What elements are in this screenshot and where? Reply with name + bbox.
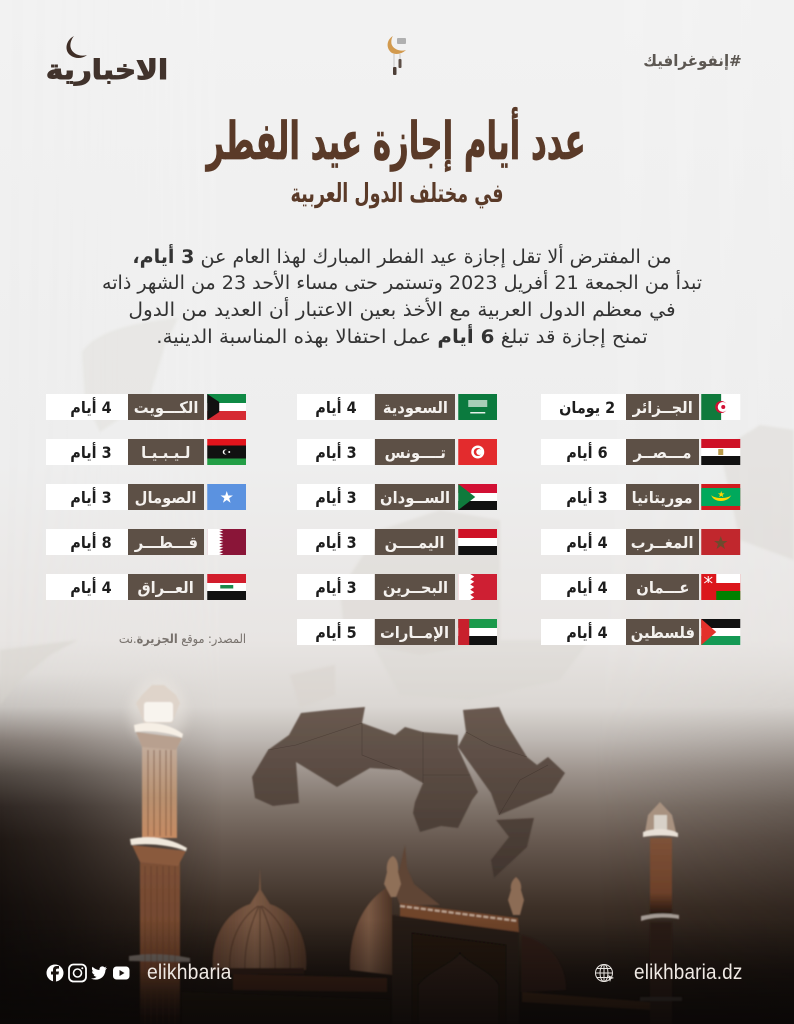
row: Somalia — [46, 484, 246, 510]
row: UAE — [297, 619, 497, 645]
row: Egypt — [541, 439, 740, 465]
mosque illustration — [129, 685, 682, 1024]
row: Yemen: اليمــــن — [385, 532, 445, 552]
social handle: elikhbaria — [147, 961, 232, 984]
logo: Alikhbaria — [46, 36, 168, 86]
row: Egypt: 6 أيام — [566, 442, 608, 462]
row: Kuwait: 4 أيام — [70, 398, 111, 416]
row: Bahrain: 3 أيام — [315, 578, 356, 596]
row: Algeria: الجــزائر — [632, 398, 693, 416]
minaret glow — [130, 678, 186, 746]
right minaret — [640, 802, 682, 1024]
background: gradient, faint world map and mosque — [0, 318, 794, 1024]
source note: المصدر: موقع الجزيرة.نت — [119, 631, 246, 646]
lower walls — [182, 974, 650, 1024]
row: Palestine — [541, 619, 740, 645]
row: Somalia: 3 أيام — [70, 488, 111, 506]
row: Morocco: 4 أيام — [566, 532, 608, 552]
row: Kuwait — [46, 394, 246, 420]
row: Sudan: 3 أيام — [315, 488, 356, 506]
row: Mauritania: موريتانيا — [632, 488, 693, 506]
row: Somalia: الصومال — [135, 488, 197, 506]
row: Libya: لـيـبـيـا — [141, 442, 191, 462]
intro paragraph: تمنح إجازة قد تبلغ 6 أيام عمل احتفالا بهذه المناسبة الدينية. — [156, 326, 648, 348]
icon: youtube — [113, 966, 130, 980]
icon: instagram — [69, 964, 86, 982]
icon: facebook — [46, 964, 64, 982]
row: UAE: 5 أيام — [315, 622, 356, 642]
intro paragraph: من المفترض ألا تقل إجازة عيد الفطر المبارك لهذا العام عن 3 أيام، — [132, 246, 672, 268]
row: Sudan — [297, 484, 497, 510]
row: Oman: 4 أيام — [566, 578, 608, 596]
row: Algeria — [541, 394, 740, 420]
row: UAE: الإمــارات — [380, 622, 450, 642]
row: Algeria: 2 يومان — [559, 398, 615, 416]
emblem: crescent and lanterns — [388, 36, 406, 75]
intro paragraph: في معظم الدول العربية مع الأخذ بعين الاعتبار أن العديد من الدول — [128, 299, 676, 321]
row: Saudi Arabia: السعودية — [382, 398, 448, 416]
row: Qatar: قـــطـــر — [134, 532, 198, 552]
faint world map — [0, 318, 794, 708]
title: عدد أيام إجازة عيد الفطر — [206, 112, 586, 172]
website: elikhbaria.dz — [634, 961, 742, 984]
subtitle: في مختلف الدول العربية — [290, 179, 504, 209]
row: Mauritania — [541, 484, 740, 510]
row: Iraq — [46, 574, 246, 600]
row: Libya: 3 أيام — [70, 442, 111, 462]
row: Kuwait: الكـــويت — [134, 398, 198, 416]
icon: globe — [595, 964, 614, 982]
row: Sudan: الســودان — [380, 488, 450, 506]
row: Iraq: العــراق — [138, 578, 194, 596]
row: Bahrain — [297, 574, 497, 600]
row: Bahrain: البحــرين — [382, 578, 448, 596]
logo wordmark: الاخبارية — [46, 55, 168, 86]
row: Iraq: 4 أيام — [70, 578, 111, 596]
logo crescent — [66, 36, 87, 58]
row: Palestine: 4 أيام — [566, 622, 608, 642]
row: Tunisia: تــــونس — [384, 442, 446, 462]
row: Saudi Arabia — [297, 394, 497, 420]
row: Oman — [541, 574, 740, 600]
left dome — [213, 868, 306, 974]
row: Morocco — [541, 529, 740, 555]
gateway — [392, 903, 519, 1024]
row: Qatar — [46, 529, 246, 555]
row: Qatar: 8 أيام — [70, 532, 111, 552]
row: Yemen — [297, 529, 497, 555]
intro paragraph — [102, 244, 702, 348]
left minaret — [129, 685, 190, 1024]
row: Oman: عـــمان — [636, 578, 689, 596]
social icons — [46, 964, 130, 982]
row: Mauritania: 3 أيام — [566, 488, 608, 506]
row: Tunisia — [297, 439, 497, 465]
row: Yemen: 3 أيام — [315, 532, 356, 552]
row: Morocco: المغــرب — [631, 532, 694, 552]
right dome — [521, 935, 566, 992]
row: Saudi Arabia: 4 أيام — [315, 398, 356, 416]
row: Palestine: فلسطين — [630, 622, 695, 642]
row: Egypt: مـــصــر — [634, 442, 691, 462]
icon: twitter — [91, 966, 107, 980]
row: Tunisia: 3 أيام — [315, 442, 356, 462]
centre dome and turrets — [350, 845, 524, 975]
intro paragraph: تبدأ من الجمعة 21 أفريل 2023 وتستمر حتى مساء الأحد 23 من الشهر ذاته — [102, 272, 702, 294]
hashtag: #إنفوغرافيك — [643, 52, 742, 70]
row: Libya — [46, 439, 246, 465]
